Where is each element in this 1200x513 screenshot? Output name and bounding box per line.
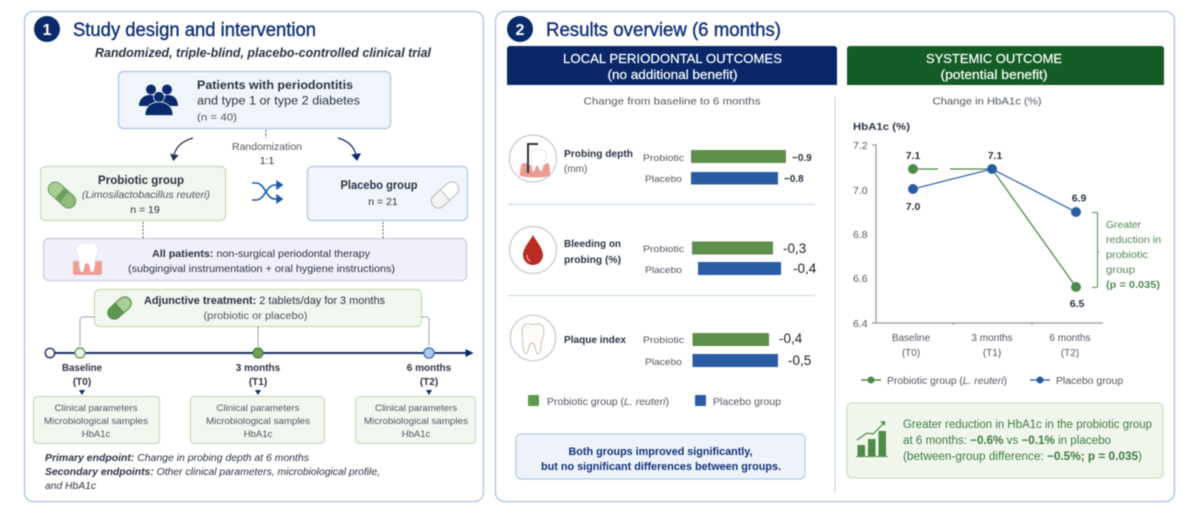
callout: both groups improved: but no significant differences between groups. — [541, 461, 781, 473]
box: T2 assessments: Clinical parameters — [375, 403, 457, 414]
bars: probing depth: Probiotic — [643, 153, 684, 164]
text: all patients therapy: All patients: non-surgical periodontal therapy — [152, 248, 371, 260]
box: T0 assessments: HbA1c — [82, 429, 111, 440]
box: T2 assessments: Microbiological samples — [364, 416, 468, 427]
text: patients description — [197, 80, 360, 124]
data labels: 7.1 — [906, 150, 920, 162]
heading: results overview: Results overview (6 months) — [546, 20, 781, 41]
text: placebo group: n = 21 — [368, 196, 398, 208]
axes and y labels — [853, 140, 1103, 330]
icon: patients group — [139, 84, 178, 116]
legend: local outcomes: Probiotic group ( L. reuteri) — [547, 397, 669, 408]
text: HbA1c reduction: (between-group difference: −0.5%; p = 0.035) — [903, 451, 1142, 463]
axes and y labels: 6.6 — [853, 273, 868, 285]
axis title: HbA1c (%) — [853, 121, 910, 133]
randomization label — [232, 130, 302, 167]
bars: probing depth: −0.8 — [784, 174, 804, 185]
axes and y labels: 6.8 — [853, 229, 868, 241]
header: systemic outcome: (potential benefit) — [940, 68, 1048, 82]
text: probiotic group: (Limosilactobacillus reuteri) — [82, 190, 210, 201]
header: local outcomes — [507, 46, 837, 85]
bracket annotation: probiotic — [1106, 249, 1148, 261]
text: HbA1c reduction: at 6 months: −0.6% vs −0.1% in placebo — [903, 435, 1111, 447]
arrow: to placebo group — [338, 138, 360, 160]
data labels: 7.0 — [906, 201, 920, 213]
icon: rising bar chart — [856, 421, 888, 456]
row: probing depth — [510, 135, 812, 185]
box: patients — [118, 72, 390, 128]
bars: plaque index — [643, 331, 811, 368]
callout: both groups improved: Both groups improved significantly, — [568, 446, 752, 458]
legend: line chart — [861, 376, 1123, 387]
label: probing depth: (mm) — [564, 164, 587, 175]
text: probiotic group: Probiotic group — [98, 175, 184, 187]
text: adjunctive treatment: (probiotic or placebo) — [204, 310, 308, 322]
legend: line chart: Placebo group — [1056, 376, 1123, 387]
text: adjunctive treatment — [144, 295, 385, 322]
text: endpoints: Primary endpoint: Change in probing depth at 6 months — [45, 452, 310, 464]
bars: plaque index: Probiotic — [643, 335, 684, 346]
text: probiotic group: n = 19 — [130, 204, 160, 216]
x axis labels: (T0) — [902, 348, 920, 359]
text: endpoints: and HbA1c — [45, 480, 97, 492]
label: plaque index: Plaque index — [564, 335, 626, 346]
icon: shuffle randomization — [252, 182, 282, 202]
panel: study design and intervention — [24, 12, 484, 502]
data labels: 7.1 — [988, 150, 1002, 162]
timepoint labels — [62, 363, 452, 395]
icon: tooth with gum — [73, 243, 102, 275]
icon: green capsule — [45, 179, 79, 211]
box: all patients — [44, 238, 466, 280]
section number 1: 1 — [43, 22, 52, 39]
timepoint labels: Baseline — [62, 363, 102, 374]
caption: change from baseline: Change from baseline to 6 months — [584, 96, 760, 108]
panel: results overview — [496, 12, 1174, 502]
bracket annotation: (p = 0.035) — [1106, 279, 1160, 291]
axes and y labels: 7.0 — [853, 185, 868, 197]
line chart: HbA1c — [853, 121, 1161, 359]
caption: change in HbA1c: Change in HbA1c (%) — [932, 96, 1042, 108]
section number 2 — [507, 16, 533, 42]
box: adjunctive treatment — [94, 290, 422, 326]
icon: capsule — [105, 294, 134, 322]
legend: local outcomes: Placebo group — [713, 397, 781, 408]
x axis labels: (T2) — [1061, 348, 1079, 359]
section number 1 — [34, 16, 60, 42]
text: all patients therapy: (subgingival instrumentation + oral hygiene instructions) — [128, 263, 395, 275]
subpanel: local periodontal outcomes — [507, 46, 837, 493]
callout: HbA1c reduction — [847, 403, 1163, 478]
row: bleeding on probing — [510, 226, 817, 276]
icon: tooth — [510, 315, 556, 361]
bars: probing depth: Placebo — [645, 174, 682, 185]
label: bleeding on probing — [564, 239, 621, 266]
arrow: to probiotic group — [171, 138, 193, 160]
callout: both groups improved — [516, 434, 805, 479]
box: T2 assessments: HbA1c — [402, 429, 431, 440]
subpanel: systemic outcome — [847, 46, 1164, 478]
timepoint labels: (T0) — [73, 377, 91, 388]
header: local outcomes: LOCAL PERIODONTAL OUTCOMES — [563, 52, 782, 66]
text: all patients therapy — [128, 248, 395, 275]
heading: study design: Study design and intervention — [73, 20, 316, 41]
label: bleeding on probing: Bleeding on — [564, 239, 621, 250]
series: placebo — [908, 164, 1081, 217]
box: T1 assessments: HbA1c — [244, 429, 273, 440]
text: HbA1c reduction — [903, 419, 1152, 463]
box: T0 assessments — [34, 396, 160, 444]
header: systemic outcome: SYSTEMIC OUTCOME — [926, 52, 1062, 66]
subtitle: trial type: Randomized, triple-blind, placebo-controlled clinical trial — [95, 46, 432, 60]
icon: blood drop — [510, 226, 556, 274]
text: placebo group: Placebo group — [340, 180, 418, 192]
text: patients description: (n = 40) — [197, 112, 237, 124]
label: probing depth: Probing depth — [564, 149, 633, 160]
bars: plaque index: -0,5 — [788, 353, 811, 368]
bracket annotation: reduction in — [1106, 234, 1161, 246]
text: endpoints — [45, 452, 380, 492]
axes and y labels: 6.4 — [853, 318, 868, 330]
text: endpoints: Secondary endpoints: Other clinical parameters, microbiological profile, — [45, 466, 380, 478]
box: T1 assessments: Clinical parameters — [216, 403, 300, 414]
row: plaque index — [510, 315, 811, 368]
bars: probing depth — [643, 150, 812, 185]
box: placebo group — [308, 166, 468, 220]
label: probing depth — [564, 149, 633, 175]
icon: probe and tooth — [510, 135, 556, 182]
text: patients description: and type 1 or type 2 diabetes — [197, 96, 360, 108]
randomization label: 1:1 — [260, 155, 274, 167]
label: bleeding on probing: probing (%) — [564, 255, 621, 266]
box: T2 assessments — [356, 396, 476, 444]
bars: bleeding on probing: -0,3 — [783, 241, 806, 256]
bracket annotation: Greater — [1106, 219, 1141, 231]
text: patients description: Patients with periodontitis — [197, 80, 353, 92]
x axis labels: (T1) — [983, 348, 1001, 359]
randomization label: Randomization — [232, 141, 302, 153]
text: probiotic group — [82, 175, 210, 216]
section number 2: 2 — [516, 22, 525, 39]
x axis labels: Baseline — [892, 333, 931, 344]
bars: bleeding on probing: Probiotic — [643, 244, 684, 255]
bars: plaque index: Placebo — [645, 357, 682, 368]
bars: bleeding on probing — [643, 241, 817, 276]
bracket annotation: group — [1106, 264, 1135, 276]
timeline — [45, 348, 474, 358]
text: placebo group — [340, 180, 418, 208]
text: adjunctive treatment: Adjunctive treatment: 2 tablets/day for 3 months — [144, 295, 385, 307]
data labels — [906, 150, 1086, 310]
bars: probing depth: −0.9 — [792, 153, 812, 164]
box: T0 assessments: Clinical parameters — [54, 403, 138, 414]
timepoint labels: (T1) — [249, 377, 267, 388]
legend: local outcomes — [528, 395, 781, 408]
header: local outcomes: (no additional benefit) — [608, 68, 738, 82]
x axis labels — [892, 333, 1091, 359]
timepoint labels: 6 months — [407, 363, 452, 374]
box: T0 assessments: Microbiological samples — [44, 416, 148, 427]
box: T1 assessments — [190, 396, 324, 444]
axes and y labels: 7.2 — [853, 140, 868, 152]
x axis labels: 3 months — [971, 333, 1013, 344]
data labels: 6.9 — [1072, 192, 1086, 204]
bars: bleeding on probing: Placebo — [645, 265, 682, 276]
timepoint labels: 3 months — [236, 363, 281, 374]
legend: line chart: Probiotic group (L. reuteri) — [887, 376, 1007, 387]
bracket annotation — [1092, 212, 1161, 291]
timepoint labels: (T2) — [420, 377, 438, 388]
text: HbA1c reduction: Greater reduction in HbA1c in the probiotic group — [903, 419, 1152, 431]
data labels: 6.5 — [1070, 298, 1084, 310]
bars: bleeding on probing: -0,4 — [793, 261, 817, 276]
series: probiotic — [908, 164, 1081, 292]
header: systemic outcome — [847, 46, 1164, 85]
bars: plaque index: -0,4 — [779, 331, 803, 346]
icon: white capsule — [428, 179, 462, 211]
box: T1 assessments: Microbiological samples — [206, 416, 310, 427]
box: probiotic group — [40, 166, 226, 220]
x axis labels: 6 months — [1049, 333, 1091, 344]
